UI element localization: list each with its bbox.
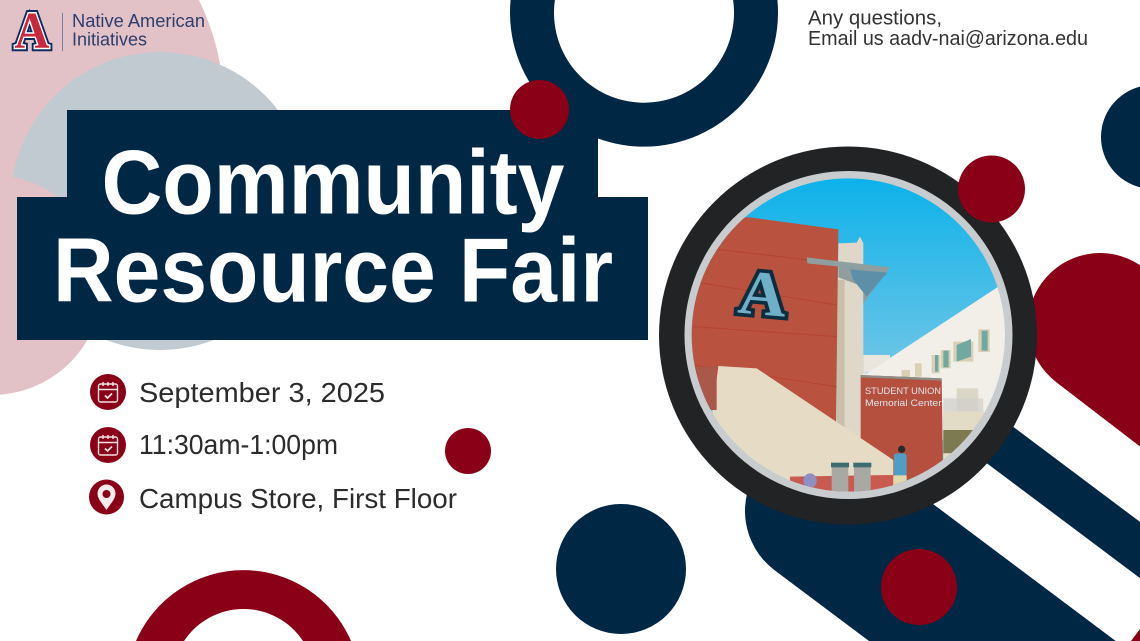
magnifier photo frame — [659, 146, 1037, 524]
logo wordmark: Native American — [72, 11, 205, 31]
trash cans — [832, 465, 871, 492]
logo wordmark: Initiatives — [72, 30, 147, 50]
event details — [89, 374, 457, 514]
icon: location pin — [89, 480, 124, 514]
contact text: Email us aadv-nai@arizona.edu — [808, 28, 1088, 50]
background shape: top navy ring — [510, 0, 778, 147]
title banner — [17, 110, 648, 340]
background shape: bottom red ring — [136, 570, 351, 641]
icon: calendar date — [90, 374, 126, 410]
contact text: Any questions, — [808, 8, 942, 30]
navy circle lower centre — [556, 504, 686, 634]
concrete tower — [836, 237, 863, 440]
background shape: right navy circle — [1101, 87, 1140, 187]
sign wall — [861, 375, 943, 492]
red dot in navy pill — [881, 549, 957, 625]
date text: September 3, 2025 — [139, 377, 385, 408]
logo: Native American Initiatives — [14, 3, 205, 60]
red dot on magnifier — [958, 156, 1025, 222]
sign text — [866, 388, 942, 406]
red dot beside details — [445, 428, 491, 474]
icon: block A: A — [14, 3, 50, 60]
logo wordmark — [72, 11, 205, 50]
base stripe — [790, 475, 893, 492]
photo: Student Union building — [683, 178, 1005, 492]
red dot on banner corner — [510, 80, 569, 139]
sign text: STUDENT UNION — [865, 386, 941, 396]
background shape: pink lower blob — [0, 175, 102, 395]
title text: Community — [102, 132, 565, 233]
background shape: grey circle — [11, 52, 309, 350]
icon: calendar time — [90, 427, 126, 463]
diagonal pill: red — [1028, 253, 1140, 446]
corner red sliver — [1131, 629, 1140, 641]
diagonal pill: thin navy — [886, 352, 1140, 578]
time text: 11:30am-1:00pm — [139, 429, 338, 460]
brick wall — [683, 217, 838, 423]
contact text — [808, 8, 1088, 50]
location text: Campus Store, First Floor — [139, 483, 457, 514]
canopy — [807, 257, 890, 303]
title text: Resource Fair — [53, 221, 613, 322]
title text — [53, 132, 613, 322]
beige ramp wall — [700, 366, 893, 492]
sign text: Memorial Center — [865, 398, 942, 408]
person — [893, 446, 907, 489]
diagonal pill: wide navy — [745, 437, 1116, 641]
background shape: pink top blob — [0, 0, 223, 210]
white wing building — [861, 287, 1005, 440]
icon: block A: A — [14, 3, 50, 60]
block A on wall: A — [736, 257, 790, 331]
